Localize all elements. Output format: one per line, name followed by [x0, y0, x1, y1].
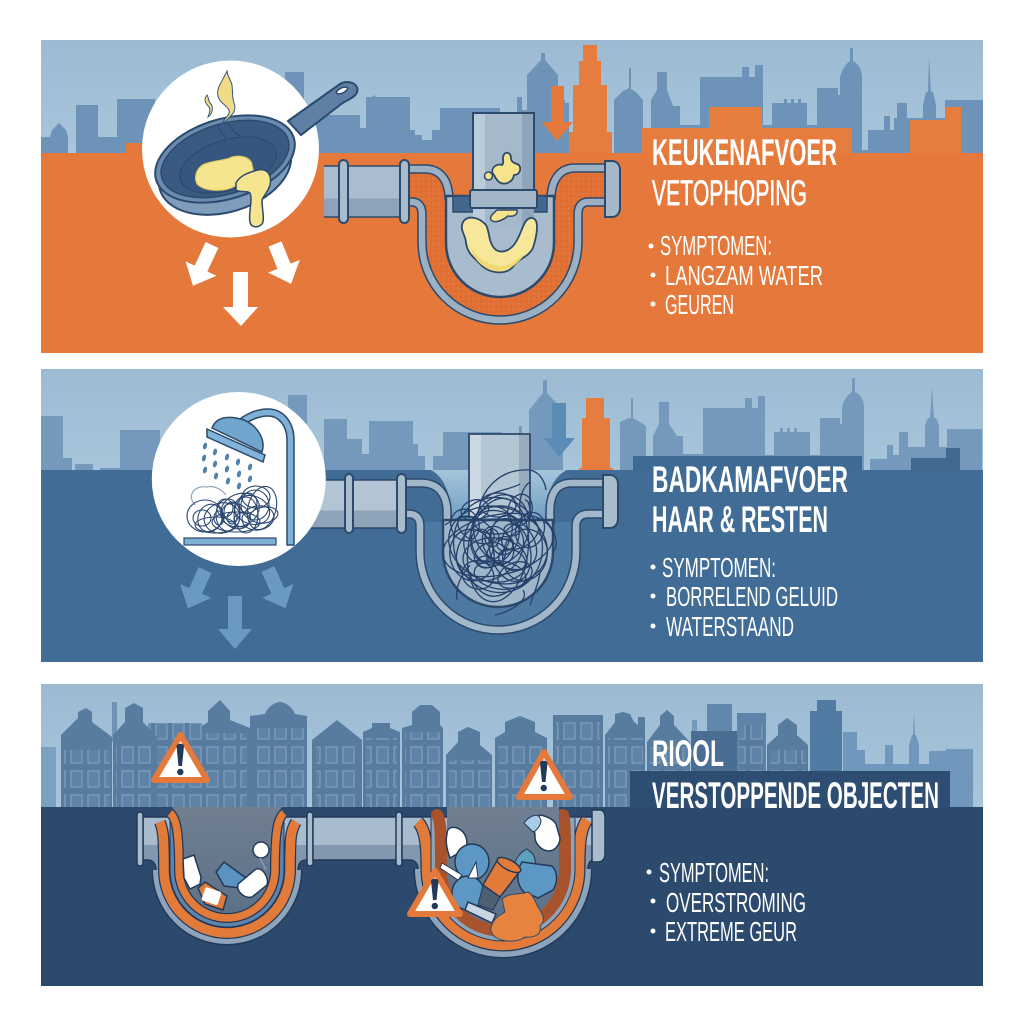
vertical pipe	[473, 113, 534, 228]
orange tower	[579, 398, 613, 470]
arrow: right	[259, 238, 307, 290]
title banner	[633, 456, 862, 471]
symptoms list: GEUREN	[665, 289, 734, 320]
hair ball	[187, 483, 281, 537]
heading	[652, 459, 848, 540]
flange right	[605, 161, 620, 217]
outer band	[422, 522, 578, 630]
title banner	[630, 771, 950, 808]
bowl	[443, 520, 553, 607]
upper bands	[404, 483, 604, 525]
left drain	[137, 807, 402, 941]
steam	[218, 71, 235, 124]
symptoms list	[646, 857, 806, 947]
warning: lower	[410, 871, 460, 914]
symptoms list	[650, 552, 838, 642]
debris: wipes pack	[183, 855, 201, 889]
heading: VETOPHOPING	[652, 174, 807, 213]
debris: teal cap	[513, 849, 535, 868]
fat blob on pipe	[492, 153, 520, 184]
ground	[41, 807, 983, 986]
symptoms list: EXTREME GEUR	[665, 916, 797, 947]
collar	[470, 190, 537, 208]
water drops	[201, 442, 253, 490]
panel: badkamerafvoer	[41, 369, 983, 662]
symptoms list: SYMPTOMEN:	[659, 857, 769, 888]
middle pipe	[313, 817, 397, 860]
debris: blue blob lower	[452, 876, 484, 910]
sky	[41, 369, 983, 471]
interior	[172, 807, 282, 914]
ground	[41, 470, 983, 662]
dripping fat	[236, 170, 270, 227]
pan body	[148, 110, 302, 230]
skyline	[41, 378, 982, 470]
debris: white bottle	[533, 815, 560, 851]
fat drops	[491, 210, 517, 222]
panel: riool	[41, 684, 983, 986]
arrow: left	[178, 238, 227, 293]
debris: orange bottle	[483, 859, 520, 897]
flange middle-left	[307, 812, 313, 866]
arrow: blue down	[544, 403, 575, 457]
flange right	[592, 810, 605, 862]
outer grease	[418, 820, 587, 945]
canal houses	[41, 700, 808, 807]
blue band	[173, 818, 281, 924]
inner grease	[170, 813, 284, 918]
handle	[288, 82, 357, 135]
icon circle: pan	[142, 60, 357, 238]
flange middle	[397, 474, 406, 533]
heading: KEUKENAFVOER	[652, 132, 837, 173]
shower arm	[240, 409, 294, 545]
symptoms list: OVERSTROMING	[666, 887, 806, 918]
right drain	[402, 807, 605, 954]
fat in bend	[462, 218, 537, 272]
orange tower	[569, 45, 612, 153]
heading: BADKAMAFVOER	[652, 459, 848, 500]
debris: white blob	[446, 827, 467, 858]
shelf	[184, 538, 276, 545]
opening	[431, 470, 567, 522]
icon circle: shower	[152, 392, 326, 566]
bowl	[446, 196, 554, 297]
symptoms list: WATERSTAAND	[666, 611, 794, 642]
flange left	[345, 474, 353, 533]
warning: left	[154, 735, 207, 780]
debris: ball	[253, 842, 269, 858]
interior	[447, 807, 559, 925]
debris: orange blob	[491, 892, 543, 941]
symptoms list	[648, 230, 823, 320]
symptoms list: LANGZAM WATER	[665, 260, 823, 291]
white circle	[142, 60, 319, 238]
symptoms list: BORRELEND GELUID	[666, 581, 838, 612]
debris: spike	[468, 862, 478, 878]
flange left	[339, 160, 348, 223]
drain pipe	[300, 434, 618, 630]
sky	[41, 684, 983, 808]
pipe body	[143, 817, 307, 941]
flange middle-right	[396, 812, 402, 866]
orange step	[126, 143, 156, 155]
debris: cup	[238, 869, 267, 897]
debris: tools	[465, 902, 496, 923]
grey band	[434, 818, 572, 938]
arrow: down	[223, 272, 258, 326]
flange middle	[400, 160, 409, 223]
connector	[453, 196, 547, 212]
debris: tool	[440, 863, 462, 880]
sky	[41, 40, 983, 154]
debris: orange box	[198, 882, 227, 910]
debris: blue bottle	[518, 862, 557, 898]
shower head	[212, 417, 263, 452]
debris: blue pack	[216, 862, 246, 888]
white circle	[152, 392, 326, 566]
arrow: down	[218, 596, 252, 649]
fat in pan	[196, 156, 254, 190]
title banner	[642, 107, 852, 154]
heading: RIOOL	[652, 733, 724, 774]
horizontal pipe	[324, 166, 408, 217]
heading	[652, 733, 939, 816]
skyline	[41, 48, 983, 153]
panel: keukenafvoer	[41, 40, 983, 353]
outer grease	[160, 822, 296, 933]
flange right	[603, 475, 618, 528]
arrow: left	[172, 563, 221, 615]
outer band	[418, 869, 588, 954]
dark buildings right	[911, 448, 960, 471]
heading: HAAR & RESTEN	[652, 499, 828, 540]
arrow: orange down	[542, 86, 573, 141]
ground	[41, 153, 983, 353]
symptoms list: SYMPTOMEN:	[660, 230, 772, 261]
modern skyline	[810, 700, 842, 807]
brown deposit	[437, 815, 565, 931]
flange left	[137, 812, 143, 866]
debris: dark canister	[478, 885, 500, 910]
heading	[652, 132, 837, 213]
warning: right	[519, 752, 570, 797]
fat layer	[406, 168, 606, 320]
drain pipe	[324, 113, 620, 320]
arrow: right	[252, 562, 301, 615]
symptoms list: SYMPTOMEN:	[662, 552, 776, 583]
pipe body	[402, 817, 594, 954]
horizontal pipe	[300, 480, 404, 528]
debris: blue blob	[455, 844, 489, 880]
outer band	[156, 870, 298, 941]
hair clog	[437, 470, 559, 615]
vertical pipe	[469, 434, 530, 518]
orange buildings right	[910, 107, 961, 154]
